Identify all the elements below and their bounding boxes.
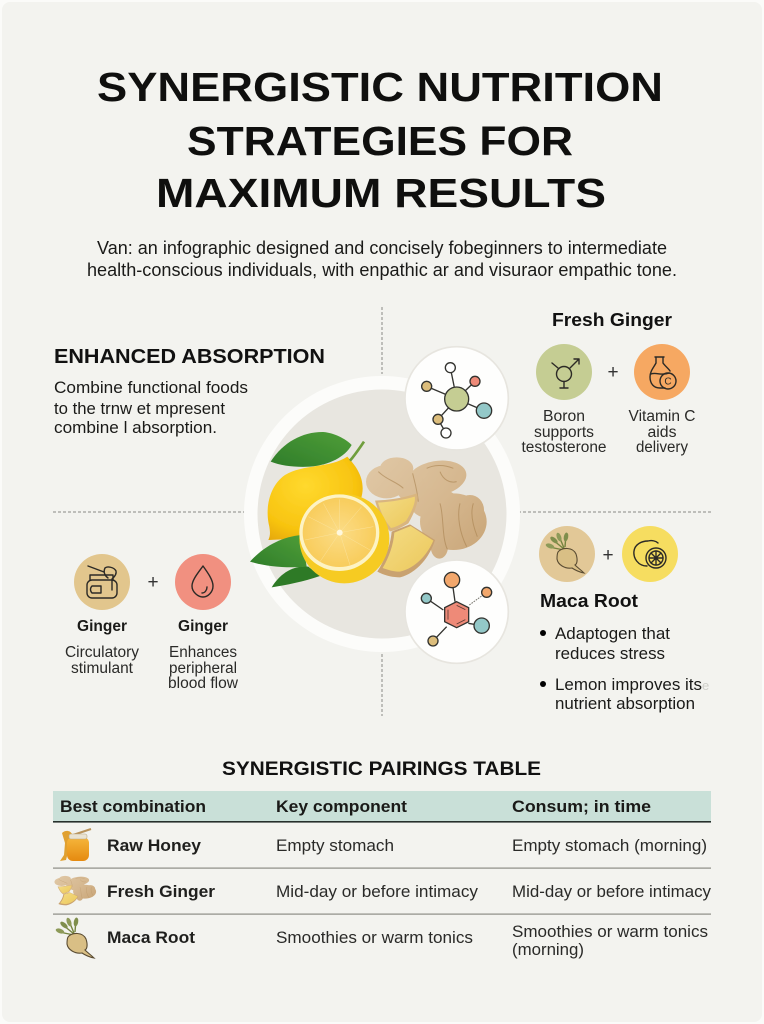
text: boron: supports <box>534 424 594 441</box>
text block: absorption description: to the trnw et mpresent <box>54 400 225 418</box>
grey disc <box>258 390 506 638</box>
text: enhances blood flow: peripheral <box>169 660 237 677</box>
text: circulatory stimulant: Ginger <box>77 618 127 635</box>
panel: ginger pairing <box>65 554 239 692</box>
text: boron: testosterone <box>522 439 606 456</box>
text: enhances blood flow: Enhances <box>169 644 237 661</box>
subtitle: Van: an infographic designed and concisely fobeginners to intermediate <box>97 238 667 258</box>
subtitle: health-conscious individuals, with enpathic ar and visuraor empathic tone. <box>87 260 677 280</box>
molecule badge bottom <box>405 560 508 663</box>
text: enhances blood flow <box>168 618 239 692</box>
row: maca root <box>55 917 708 959</box>
bullet list: e <box>702 678 709 693</box>
icon: boron symbol <box>536 344 592 400</box>
row: fresh ginger <box>54 876 712 905</box>
icon: ginger root <box>366 456 487 577</box>
icon: lemon <box>622 526 678 582</box>
bullet list <box>540 625 709 713</box>
molecule badge top <box>405 347 508 450</box>
bullet list: Adaptogen that <box>555 625 670 643</box>
bullet list: reduces stress <box>555 645 665 663</box>
panel: fresh ginger <box>522 309 696 456</box>
row: raw honey: Empty stomach <box>276 837 394 855</box>
icon: bottom leaves <box>250 535 320 587</box>
text: vitamin C <box>628 408 696 456</box>
text: vitamin C: delivery <box>636 439 688 456</box>
table header row: Consum; in time <box>512 798 651 816</box>
heading: fresh ginger: Fresh Ginger <box>552 309 672 330</box>
text: circulatory stimulant: stimulant <box>71 660 134 677</box>
icon: vitamin C bottle: C <box>664 376 672 388</box>
table header row: Key component <box>276 798 408 816</box>
icon: maca root <box>539 526 595 582</box>
text: boron <box>522 408 606 456</box>
subtitle <box>87 238 677 280</box>
row: maca root: Maca Root <box>107 929 196 947</box>
heading: maca root: Maca Root <box>540 590 638 611</box>
table header row: Best combination <box>60 798 206 816</box>
row: maca root: Smoothies or warm tonics <box>276 929 473 947</box>
bullet list: nutrient absorption <box>555 695 695 713</box>
row: fresh ginger: Fresh Ginger <box>107 883 216 901</box>
text: boron: Boron <box>543 408 585 425</box>
text: enhances blood flow: Ginger <box>178 618 228 635</box>
panel: maca root <box>539 526 709 713</box>
plus sign: + <box>147 572 159 593</box>
row: raw honey <box>60 829 707 861</box>
text: enhances blood flow: blood flow <box>168 675 239 692</box>
icon: cut lemon <box>299 494 389 583</box>
text: circulatory stimulant: Circulatory <box>65 644 139 661</box>
text: vitamin C: aids <box>648 424 677 441</box>
row: maca root: Smoothies or warm tonics <box>512 923 708 941</box>
row: raw honey: Raw Honey <box>107 837 202 855</box>
row: fresh ginger: Mid-day or before intimacy <box>512 883 712 901</box>
row: fresh ginger: Mid-day or before intimacy <box>276 883 479 901</box>
panel: enhanced absorption <box>54 345 325 437</box>
table header row <box>53 791 711 823</box>
plus sign: + <box>602 545 614 566</box>
title: MAXIMUM RESULTS <box>156 170 606 216</box>
icon: vitamin C bottle <box>634 344 690 400</box>
title: SYNERGISTIC NUTRITION <box>97 64 663 110</box>
icon: top leaf and stem <box>271 432 364 467</box>
heading: table title: SYNERGISTIC PAIRINGS TABLE <box>222 758 541 780</box>
row: maca root: (morning) <box>512 941 584 959</box>
icon: ginger <box>54 876 96 905</box>
text: vitamin C: Vitamin C <box>628 408 696 425</box>
icon: honey jar <box>74 554 130 610</box>
text block: absorption description: combine l absorption. <box>54 419 217 437</box>
table: synergistic pairings <box>53 758 712 959</box>
plus sign: + <box>607 362 619 383</box>
text block: absorption description: Combine functional foods <box>54 379 248 397</box>
white ring <box>244 376 520 652</box>
central circle with lemon and ginger <box>244 376 520 652</box>
bullet list: Lemon improves its <box>555 676 702 694</box>
text block: absorption description <box>54 379 248 437</box>
icon: whole lemon <box>268 457 363 540</box>
row: raw honey: Empty stomach (morning) <box>512 837 707 855</box>
icon: honey jar <box>60 829 91 861</box>
icon: maca root <box>55 917 94 958</box>
icon: blood drop <box>175 554 231 610</box>
text: circulatory stimulant <box>65 618 139 677</box>
illustration: lemon and ginger <box>250 432 487 587</box>
title <box>97 64 663 216</box>
heading: enhanced absorption: ENHANCED ABSORPTION <box>54 345 325 368</box>
title: STRATEGIES FOR <box>187 118 573 164</box>
